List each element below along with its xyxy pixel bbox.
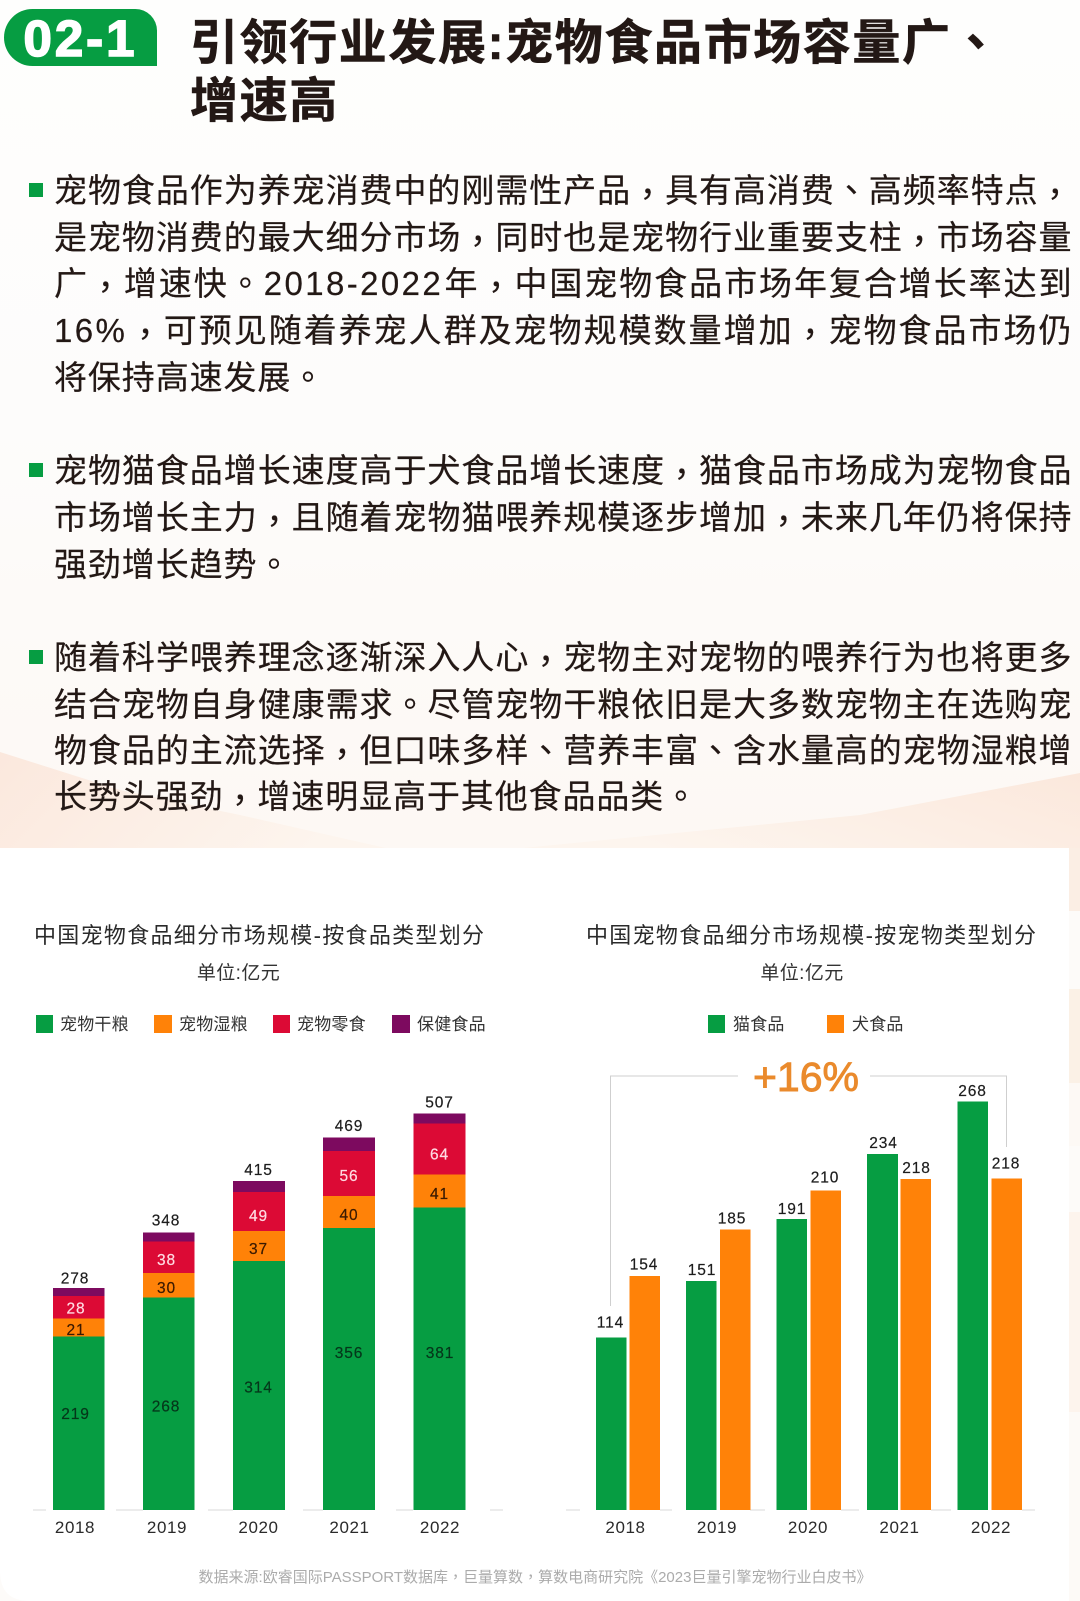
left x axis years [55, 1518, 460, 1537]
bar 2019 [143, 1232, 194, 1510]
growth bracket [610, 1076, 1006, 1306]
right x axis years [605, 1518, 1011, 1537]
left orange labels: 41 [430, 1186, 449, 1203]
left totals: 507 [425, 1094, 454, 1112]
left red labels: 49 [249, 1208, 268, 1225]
left chart: stacked bars by food type [33, 923, 503, 1537]
right x axis years: 2020 [788, 1518, 828, 1537]
text: 将保持高速发展。 [54, 351, 325, 399]
right axis [566, 1509, 1035, 1511]
left totals: 278 [61, 1270, 89, 1288]
bar 2020 [233, 1181, 285, 1510]
left red labels: 64 [430, 1146, 449, 1164]
right chart title: 中国宠物食品细分市场规模-按宠物类型划分 [586, 923, 1037, 948]
left red labels: 56 [339, 1168, 359, 1185]
left x axis years: 2018 [55, 1518, 95, 1537]
left green labels: 381 [426, 1345, 454, 1362]
orange bars [630, 1178, 1022, 1510]
right x axis years: 2022 [971, 1518, 1011, 1537]
text: 物食品的主流选择，但口味多样、营养丰富、含水量高的宠物湿粮增 [54, 724, 1072, 776]
right value labels: 154 [630, 1256, 658, 1274]
left totals: 415 [244, 1162, 273, 1179]
title: 引领行业发展:宠物食品市场容量广、 [190, 3, 1001, 73]
text: 是宠物消费的最大细分市场，同时也是宠物行业重要支柱，市场容量 [54, 215, 1072, 263]
left legend: 保健食品 [417, 1015, 486, 1034]
source note: 数据来源:欧睿国际PASSPORT数据库，巨量算数，算数电商研究院《2023巨量引擎宠物行业白皮书》 [199, 1566, 871, 1587]
text: 宠物猫食品增长速度高于犬食品增长速度，猫食品市场成为宠物食品 [54, 448, 1072, 496]
left green labels: 314 [244, 1380, 273, 1396]
right value labels: 185 [718, 1210, 746, 1228]
left orange labels: 30 [157, 1280, 176, 1297]
title [190, 3, 1001, 128]
left legend: 宠物零食 [297, 1015, 366, 1034]
right chart: grouped bars by pet type [566, 923, 1037, 1537]
bullet 1 [29, 183, 43, 197]
right x axis years: 2021 [879, 1518, 920, 1537]
right value labels [597, 1083, 1020, 1332]
left orange labels: 37 [249, 1241, 268, 1258]
left green labels: 356 [335, 1345, 363, 1362]
text: 宠物食品作为养宠消费中的刚需性产品，具有高消费、高频率特点， [54, 164, 1072, 216]
bar 2022 [414, 1114, 466, 1510]
left legend: 宠物湿粮 [179, 1015, 248, 1034]
left orange labels: 40 [339, 1207, 359, 1224]
right x axis years: 2019 [697, 1518, 737, 1537]
growth rate callout: +16% [753, 1054, 859, 1100]
left green labels: 219 [61, 1406, 90, 1423]
left red labels: 38 [157, 1252, 176, 1269]
bullet 3 [29, 650, 43, 664]
right value labels: 218 [902, 1160, 931, 1177]
right value labels: 191 [778, 1201, 806, 1218]
left green labels [61, 1345, 454, 1423]
bar 2018 [53, 1288, 104, 1510]
left legend [36, 1015, 486, 1034]
paragraph 1 [29, 164, 1072, 399]
left red labels: 28 [66, 1300, 86, 1318]
section number badge: 02-1 [23, 10, 138, 67]
right value labels: 268 [958, 1083, 987, 1100]
right value labels: 218 [992, 1156, 1020, 1172]
text: 市场增长主力，且随着宠物猫喂养规模逐步增加，未来几年仍将保持 [54, 495, 1072, 543]
right x axis years: 2018 [605, 1518, 646, 1537]
right value labels: 234 [869, 1135, 898, 1152]
left legend: 宠物干粮 [60, 1015, 129, 1034]
left green labels: 268 [152, 1398, 180, 1416]
text: 强劲增长趋势。 [54, 538, 291, 586]
left chart title: 中国宠物食品细分市场规模-按食品类型划分 [34, 923, 485, 948]
right value labels: 151 [688, 1262, 716, 1279]
text: 随着科学喂养理念逐渐深入人心，宠物主对宠物的喂养行为也将更多 [54, 635, 1072, 683]
paragraph 3 [29, 635, 1072, 822]
bar 2021 [323, 1138, 375, 1510]
green bars [596, 1102, 988, 1510]
bullet 2 [29, 463, 43, 477]
right value labels: 210 [811, 1170, 839, 1186]
left chart unit: 单位:亿元 [197, 962, 280, 984]
left x axis years: 2019 [147, 1518, 187, 1537]
paragraph 2 [29, 448, 1072, 586]
right chart unit: 单位:亿元 [760, 962, 844, 984]
text: 广，增速快。2018-2022年，中国宠物食品市场年复合增长率达到 [54, 257, 1072, 309]
left totals: 348 [152, 1212, 180, 1230]
left orange labels [66, 1186, 449, 1339]
left x axis years: 2021 [329, 1518, 370, 1537]
left axis [33, 1509, 503, 1511]
right value labels: 114 [597, 1314, 624, 1332]
right legend [708, 1015, 904, 1034]
text: 16%，可预见随着养宠人群及宠物规模数量增加，宠物食品市场仍 [54, 308, 1072, 356]
left x axis years: 2022 [420, 1518, 460, 1537]
text: 长势头强劲，增速明显高于其他食品品类。 [54, 770, 698, 822]
left totals: 469 [335, 1118, 363, 1135]
right legend: 猫食品 [733, 1015, 785, 1034]
text: 结合宠物自身健康需求。尽管宠物干粮依旧是大多数宠物主在选购宠 [54, 678, 1072, 726]
right legend: 犬食品 [852, 1015, 904, 1034]
left totals [61, 1094, 454, 1288]
title: 增速高 [190, 75, 339, 128]
left x axis years: 2020 [238, 1518, 279, 1537]
left orange labels: 21 [66, 1322, 86, 1339]
left red labels [66, 1146, 449, 1318]
